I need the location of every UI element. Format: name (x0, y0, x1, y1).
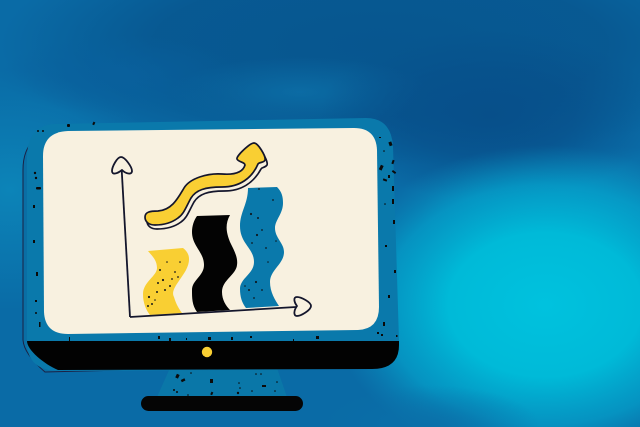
growth arrow shadow (147, 152, 267, 229)
monitor shadow outline (23, 138, 200, 372)
monitor black bezel (27, 341, 399, 370)
monitor stand base (141, 396, 303, 411)
bar: yellow (143, 248, 189, 315)
monitor camera dot (202, 347, 212, 357)
horizontal axis with arrowhead (130, 297, 311, 317)
monitor body (27, 118, 399, 371)
monitor speckles (33, 122, 398, 341)
chart (112, 143, 311, 317)
monitor screen (43, 128, 379, 334)
monitor (23, 118, 399, 411)
vertical axis with arrowhead (112, 157, 132, 317)
bar: black (192, 215, 237, 312)
bar: blue (240, 187, 284, 308)
monitor stand (157, 368, 287, 397)
growth arrow (145, 143, 265, 225)
